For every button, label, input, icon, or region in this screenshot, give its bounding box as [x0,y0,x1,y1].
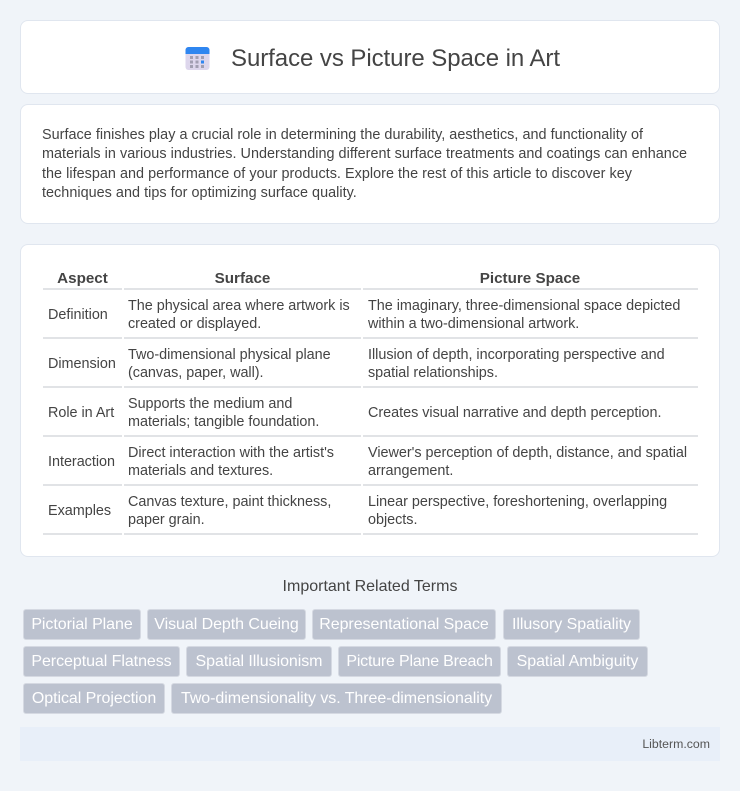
related term tags: Optical Projection [32,690,156,707]
text block: introduction: techniques and tips for optimizing surface quality. [42,185,357,201]
panel: comparison table [20,244,720,557]
comparison table: spatial relationships. [368,365,498,381]
related term tags [23,609,648,714]
comparison table: Interaction [48,454,115,470]
related term tags: Perceptual Flatness [31,653,172,670]
related term tags: Spatial Illusionism [196,653,322,670]
comparison table: created or displayed. [128,316,261,332]
comparison table [43,270,698,535]
comparison table: The imaginary, three-dimensional space depicted [368,298,680,314]
comparison table: Illusion of depth, incorporating perspective and [368,347,665,363]
related term tags: Representational Space [319,616,489,633]
comparison table: Direct interaction with the artist's [128,445,334,461]
related term tags: Two-dimensionality vs. Three-dimensionality [181,690,492,707]
text block: introduction: the lifespan and performance of your products. Explore the rest of this article to discover key [42,166,632,182]
footer bar [20,727,720,761]
related term tags: Picture Plane Breach [346,653,493,670]
comparison table: The physical area where artwork is [128,298,350,314]
comparison table: arrangement. [368,463,453,479]
comparison table: materials and textures. [128,463,273,479]
comparison table: Surface [215,270,270,287]
comparison table: Examples [48,503,111,519]
panel: introduction [20,104,720,224]
title: Surface vs Picture Space in Art [231,45,560,72]
panel: header [20,20,720,94]
comparison table: Picture Space [480,270,580,287]
related term tags: Spatial Ambiguity [517,653,638,670]
related term tags: Illusory Spatiality [512,616,631,633]
heading: related terms: Important Related Terms [283,578,457,595]
icon: calendar [186,47,210,70]
comparison table: Definition [48,307,108,323]
comparison table: Aspect [57,270,108,287]
comparison table: Two-dimensional physical plane [128,347,331,363]
comparison table: Supports the medium and [128,396,292,412]
text block: introduction: Surface finishes play a crucial role in determining the durability, aesthetics, and functionality of [42,127,643,143]
comparison table: (canvas, paper, wall). [128,365,264,381]
comparison table: Role in Art [48,405,114,421]
comparison table: Dimension [48,356,116,372]
text block: introduction: materials in various industries. Understanding different surface treatments and coatings can enhance [42,146,687,162]
comparison table: materials; tangible foundation. [128,414,319,430]
related term tags: Pictorial Plane [31,616,133,633]
comparison table: Linear perspective, foreshortening, overlapping [368,494,667,510]
comparison table: Viewer's perception of depth, distance, and spatial [368,445,687,461]
text block: introduction [42,127,687,201]
footer credit: Libterm.com [642,737,710,751]
related term tags: Visual Depth Cueing [154,616,299,633]
comparison table: paper grain. [128,512,205,528]
comparison table: within a two-dimensional artwork. [368,316,579,332]
comparison table: Canvas texture, paint thickness, [128,494,331,510]
comparison table: objects. [368,512,417,528]
comparison table: Creates visual narrative and depth perception. [368,405,661,421]
